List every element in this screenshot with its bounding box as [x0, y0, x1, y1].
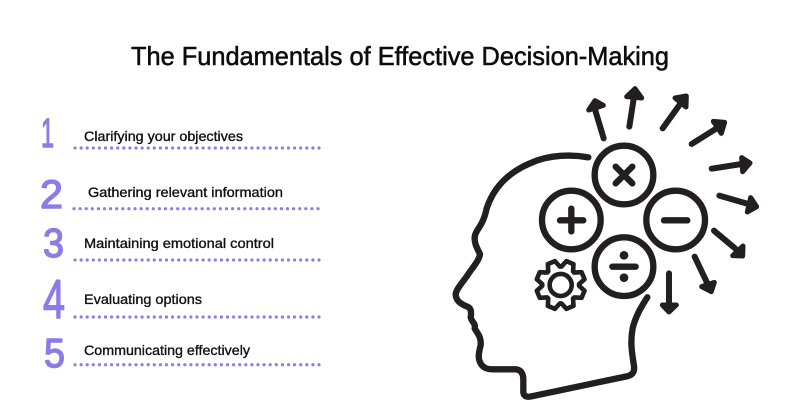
icon: head with math symbols and arrows [456, 89, 757, 397]
arrow 2 [627, 89, 642, 127]
item 5: 5 [44, 330, 65, 376]
item 2: 2 [40, 173, 63, 217]
item 1: 1 [41, 110, 54, 156]
arrow 8 [695, 257, 714, 292]
title: The Fundamentals of Effective Decision-Making [131, 41, 669, 71]
circle: plus [542, 191, 601, 249]
arrow 1 [589, 101, 604, 138]
icon: gear [537, 261, 585, 309]
item 4: 4 [43, 268, 65, 330]
item 3: Maintaining emotional control [84, 235, 274, 251]
item 5: Communicating effectively [84, 342, 250, 358]
arrow 4 [692, 121, 725, 144]
item 3: 3 [43, 220, 64, 266]
list of fundamentals [40, 110, 322, 376]
item 5 [44, 330, 322, 376]
arrow 6 [719, 196, 757, 212]
arrow 7 [714, 231, 743, 256]
circle: divide [595, 237, 653, 296]
arrow 5 [712, 158, 750, 172]
item 4 [43, 268, 322, 330]
item 2: Gathering relevant information [88, 184, 283, 200]
item 3 [43, 220, 321, 266]
head outline [456, 156, 647, 397]
item 2 [40, 173, 319, 217]
item 4: Evaluating options [84, 291, 202, 307]
circle: multiply [595, 146, 653, 204]
item 1: Clarifying your objectives [84, 128, 243, 144]
arrow 9 [662, 273, 676, 312]
circle: minus [646, 191, 705, 249]
item 1 [41, 110, 320, 156]
arrows radiating from head [589, 89, 757, 312]
arrow 3 [663, 96, 686, 128]
